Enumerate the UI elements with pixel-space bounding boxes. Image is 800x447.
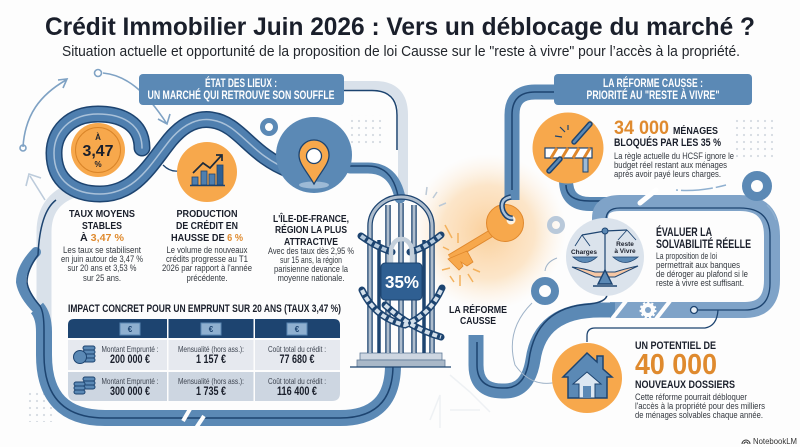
bloc: 34 000 ménages: BLOQUÉS PAR LES 35 % (614, 136, 721, 149)
bloc: production de crédit (162, 208, 252, 283)
bloc: évaluer la solvabilité: reste à vivre est suffisant. (656, 278, 744, 288)
icon: taux 3,47 %: 3,47 (82, 143, 114, 160)
bloc: taux moyens: Les taux se stabilisent (63, 245, 141, 255)
bloc: évaluer la solvabilité: La proposition de loi (656, 251, 717, 261)
tableau: impact concret: Montant Emprunté : (102, 344, 158, 354)
bloc: production de crédit: DE CRÉDIT EN (176, 219, 238, 232)
bloc: Île-de-France: ATTRACTIVE (284, 236, 338, 248)
label: la réforme Causse (449, 303, 507, 327)
icon: pièces 300 000 (74, 377, 95, 394)
bloc: 40 000 dossiers: l'accès à la propriété pour des milliers (635, 401, 765, 411)
tableau: impact concret: 200 000 € (110, 354, 150, 366)
tableau: impact concret: Mensualité (hors ass.): (178, 344, 244, 354)
tableau: impact concret: 1 735 € (196, 386, 226, 398)
tableau: impact concret: 77 680 € (280, 354, 315, 366)
cage et cadenas: 35% (385, 272, 419, 292)
icon: graphique de production (163, 142, 237, 202)
bloc: Île-de-France: parisienne devance la (274, 264, 348, 274)
tableau: impact concret: Montant Emprunté : (102, 376, 158, 386)
icon: billets (120, 323, 307, 335)
bloc: Île-de-France (268, 212, 354, 283)
left panel track (21, 86, 403, 428)
bloc: production de crédit: 2026 par rapport à l'année (162, 263, 252, 273)
banner: état des lieux: UN MARCHÉ QUI RETROUVE SON SOUFFLE (148, 89, 335, 102)
icon: balance: Charges (571, 249, 597, 256)
banner: réforme Causse: PRIORITÉ AU "RESTE À VIVRE" (586, 89, 720, 102)
bloc: Île-de-France: Avec des taux dès 2,95 % (268, 246, 354, 256)
bloc: 34 000 ménages: MÉNAGES (673, 124, 718, 137)
bloc: production de crédit: Le volume de nouveaux (166, 245, 248, 255)
titre du tableau: IMPACT CONCRET POUR UN EMPRUNT SUR 20 ANS (TAUX 3,47 %) (68, 303, 341, 315)
bloc: taux moyens: STABLES (82, 220, 122, 232)
tableau: impact concret: 116 400 € (277, 386, 317, 398)
bloc: évaluer la solvabilité: de déroger au plafond si le (656, 269, 748, 279)
bloc: 34 000 ménages: 34 000 (614, 118, 669, 139)
icon: taux 3,47 % (71, 123, 125, 177)
tableau: impact concret: Mensualité (hors ass.): (178, 376, 244, 386)
bloc: 34 000 ménages: après avoir payé leurs charges. (614, 169, 721, 179)
cercles décoratifs droite (512, 176, 776, 383)
bloc: évaluer la solvabilité (656, 226, 751, 288)
banner: état des lieux (139, 74, 344, 105)
icon: clé (426, 187, 524, 286)
icon: maison (552, 343, 622, 413)
bloc: évaluer la solvabilité: permettrait aux banques (656, 260, 740, 270)
bloc: 40 000 dossiers: 40 000 (635, 349, 717, 381)
decorative arrows left (20, 70, 276, 200)
bloc: Île-de-France: RÉGION LA PLUS (275, 223, 347, 236)
bloc: 40 000 dossiers (635, 340, 765, 420)
bloc: 40 000 dossiers: NOUVEAUX DOSSIERS (635, 379, 735, 391)
bloc: taux moyens: À 3,47 % (80, 231, 125, 244)
icon: taux 3,47 %: % (94, 160, 102, 169)
icon: billets: € (209, 325, 214, 334)
icon: balance: à Vivre (614, 248, 636, 255)
tableau: impact concret: Coût total du crédit : (268, 344, 326, 354)
icon: balance: Reste (616, 241, 634, 248)
title: Crédit Immobilier Juin 2026 : Vers un déblocage du marché ? (45, 13, 755, 41)
bloc: Île-de-France: sur 15 ans, la région (280, 255, 342, 265)
tableau: impact concret (68, 319, 340, 401)
bloc: taux moyens: sur 20 ans et 3,53 % (68, 263, 136, 273)
bloc: Île-de-France: L'ÎLE-DE-FRANCE, (273, 212, 349, 225)
label: la réforme Causse: CAUSSE (460, 315, 496, 327)
bloc: production de crédit: PRODUCTION (176, 208, 238, 220)
banner: état des lieux: ÉTAT DES LIEUX : (205, 77, 277, 90)
icon: billets: € (128, 325, 133, 334)
bloc: 40 000 dossiers: UN POTENTIEL DE (635, 340, 716, 352)
bloc: 34 000 ménages: budget réel restant aux ménages (614, 160, 727, 170)
logo: NotebookLM: NotebookLM (753, 436, 797, 446)
bloc: production de crédit: crédits progresse au T1 (166, 254, 248, 264)
icon: pièces euro 200 000 (74, 346, 95, 364)
cage et cadenas (350, 197, 451, 367)
icon: repère Île-de-France (276, 117, 352, 193)
icon: taux 3,47 %: À (95, 133, 101, 142)
tableau: impact concret: 1 157 € (196, 354, 226, 366)
bloc: taux moyens: sur 25 ans. (83, 273, 121, 283)
bloc: taux moyens: en juin autour de 3,47 % (61, 254, 143, 264)
tableau: impact concret: 300 000 € (110, 386, 150, 398)
banner: réforme Causse: LA RÉFORME CAUSSE : (603, 77, 703, 90)
cadenas 35 % (381, 263, 422, 300)
bloc: 34 000 ménages (614, 118, 734, 179)
bloc: 40 000 dossiers: Cette réforme pourrait débloquer (635, 392, 747, 402)
chaînes (361, 235, 442, 337)
icon: balance (566, 218, 644, 296)
bloc: Île-de-France: moyenne nationale. (278, 273, 344, 283)
bloc: 34 000 ménages: La règle actuelle du HCSF ignore le (614, 151, 734, 161)
track droit (476, 92, 772, 391)
icon: barrière et chaîne brisée (532, 112, 604, 184)
bloc: taux moyens: TAUX MOYENS (69, 208, 135, 220)
tableau: impact concret: Coût total du crédit : (268, 376, 326, 386)
icon: billets: € (295, 325, 300, 334)
label: la réforme Causse: LA RÉFORME (449, 303, 507, 316)
bloc: évaluer la solvabilité: ÉVALUER LA (656, 226, 712, 239)
halo de la clé (410, 154, 566, 310)
bloc: production de crédit: précédente. (186, 273, 228, 283)
bloc: taux moyens (61, 208, 143, 283)
bloc: production de crédit: HAUSSE DE 6 % (171, 232, 244, 244)
subtitle: Situation actuelle et opportunité de la proposition de loi Causse sur le "reste à vivre" pour l’accès à la propriété. (62, 43, 740, 60)
spiral track (54, 114, 400, 198)
banner: réforme Causse (554, 74, 752, 105)
bloc: 40 000 dossiers: de ménages solvables chaque année. (635, 410, 763, 420)
bloc: évaluer la solvabilité: SOLVABILITÉ RÉELLE (656, 238, 751, 251)
